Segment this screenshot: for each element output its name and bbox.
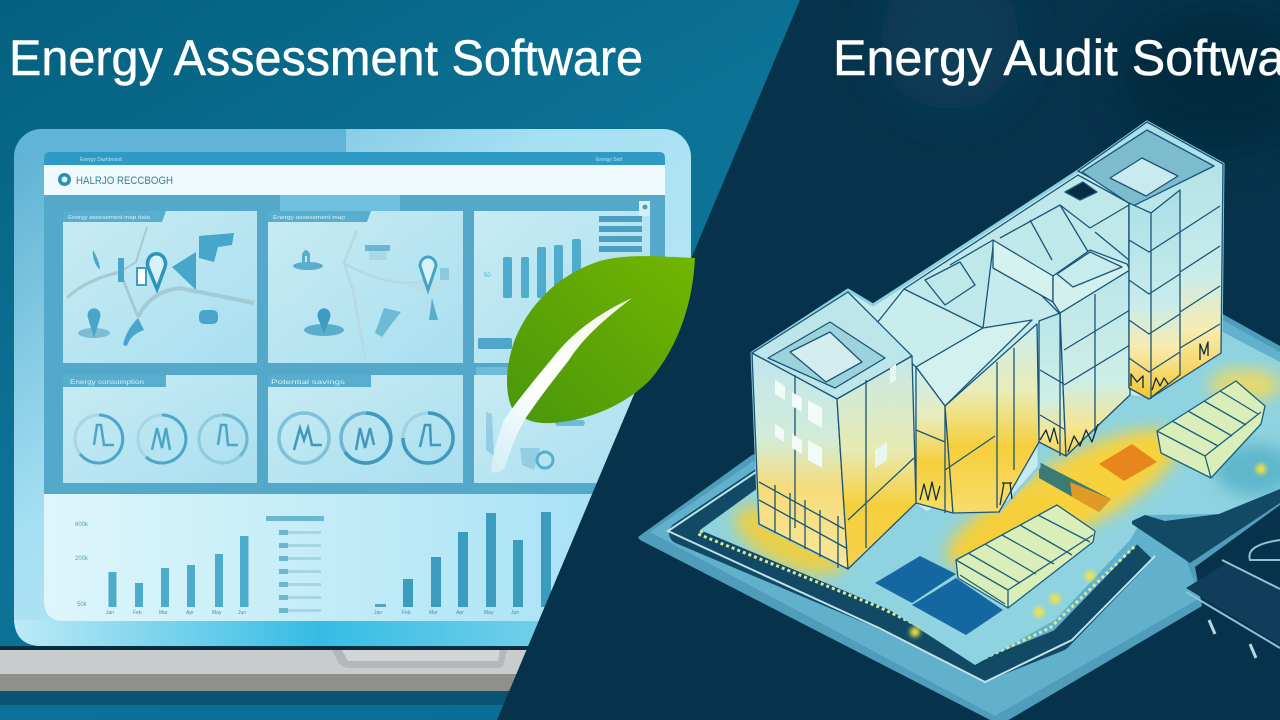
orange strip <box>1039 462 1111 512</box>
bar chart right <box>375 512 551 607</box>
axis labels <box>75 522 89 608</box>
gauge row <box>75 415 247 463</box>
bar labels right <box>374 610 519 615</box>
site ground <box>700 330 1280 665</box>
orange pad <box>1099 444 1157 481</box>
screen header: HALRJO RECCBOGH <box>76 175 173 187</box>
screen content <box>14 129 665 621</box>
panel: gauges one <box>63 375 257 483</box>
bar labels right: May <box>484 610 494 616</box>
panel: bar chart with legend <box>474 201 650 363</box>
bar labels right: Mar <box>429 610 438 616</box>
bar labels left <box>106 610 246 615</box>
heat glow <box>725 369 1280 589</box>
bar labels left: May <box>212 610 222 616</box>
bar chart left <box>108 536 248 607</box>
greenhouse one <box>956 505 1095 608</box>
panel: gauges two <box>268 375 463 483</box>
panel: map two: Energy assessment map <box>273 215 345 221</box>
panel: right dark background <box>497 0 1280 720</box>
right tower <box>1078 122 1223 399</box>
bar labels left: Feb <box>133 610 142 616</box>
legend rows <box>266 516 324 613</box>
bar labels left: Apr <box>186 610 194 616</box>
bar labels left: Mar <box>159 610 168 616</box>
panel: map one: Energy assessment map data <box>68 215 150 221</box>
panel: gauges one: Energy consumption <box>70 380 144 386</box>
site platform <box>638 312 1280 720</box>
solar panels <box>875 556 1003 635</box>
icon: green leaf <box>491 256 695 473</box>
bar labels right: Apr <box>456 610 464 616</box>
greenhouse two <box>1157 381 1265 478</box>
panel: map one <box>63 211 257 363</box>
bar labels right: Jun <box>511 610 519 616</box>
screen top bar: Energy Sett <box>596 157 623 163</box>
laptop screen bezel <box>14 129 691 646</box>
panel: third gauge card <box>474 367 650 483</box>
panel: isometric building illustration <box>638 122 1280 720</box>
panel: left background <box>0 0 820 720</box>
path lights <box>910 464 1266 637</box>
bar labels left: Jun <box>238 610 246 616</box>
screen header <box>44 165 665 195</box>
bar labels right: Jan <box>374 610 382 616</box>
laptop base <box>0 646 540 705</box>
mid block B <box>873 289 1039 513</box>
panel: map two <box>268 211 463 363</box>
panel: lower charts <box>44 494 592 621</box>
back volume <box>904 175 1129 367</box>
title: Energy Assessment Software: Energy Assessment Software <box>9 30 643 86</box>
axis labels: 50k <box>77 602 88 608</box>
panel: gauges two: Potential savings <box>271 380 345 386</box>
left tower A <box>752 292 916 569</box>
east road <box>1132 489 1280 563</box>
bezel bottom strip <box>14 618 691 646</box>
gauge row <box>279 413 453 463</box>
screen top bar: Energy Dashboard <box>80 157 122 163</box>
panel: bar chart with legend: 50 <box>484 273 491 279</box>
axis labels: 200k <box>75 556 89 562</box>
mid block C <box>993 240 1130 456</box>
building silhouette <box>752 122 1223 569</box>
south-east road <box>1186 540 1280 658</box>
axis labels: 600k <box>75 522 89 528</box>
bar labels left: Jan <box>106 610 114 616</box>
bar labels right: Feb <box>402 610 411 616</box>
screen top bar <box>44 152 665 165</box>
panel: laptop <box>0 129 691 705</box>
ring road <box>668 468 1155 682</box>
leaf highlight swoosh <box>491 298 632 473</box>
